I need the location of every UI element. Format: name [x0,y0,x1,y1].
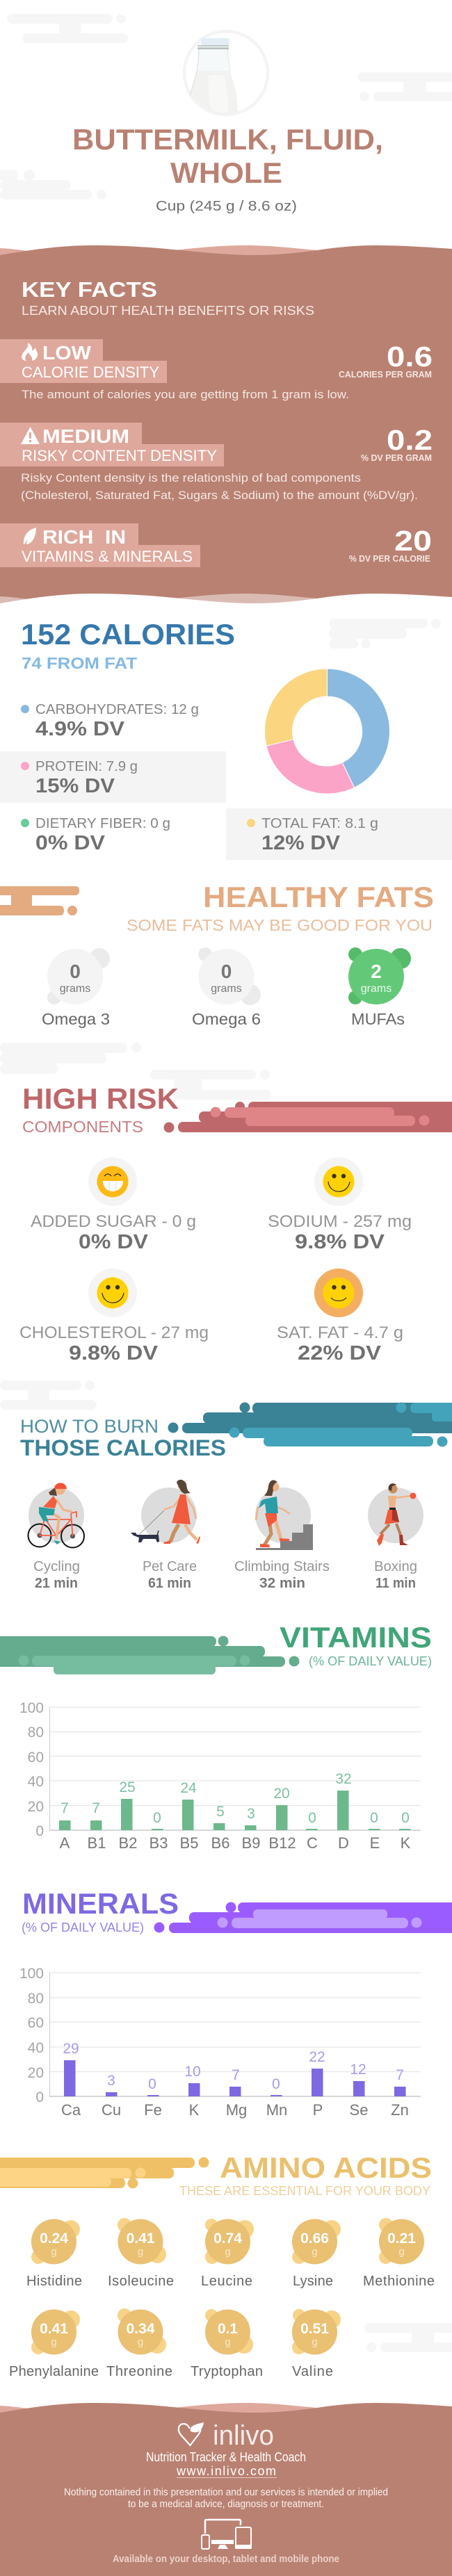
risk: saturated fat [277,1269,403,1364]
chart: minerals bar chart: Zn [391,2101,409,2119]
chart: minerals bar chart: 0 [148,2076,156,2092]
amino: lysine: 0.66 [300,2231,329,2247]
heading: healthy fats [127,881,434,934]
panel: key facts [0,245,452,613]
risk: saturated fat: SAT. FAT - 4.7 g [277,1323,403,1342]
panel: how to burn those calories [0,1380,452,1591]
amino: phenylalanine [9,2309,99,2379]
footer [0,2403,452,2576]
legend: carbohydrates: CARBOHYDRATES: 12 g [35,702,199,717]
header: product image and title [0,14,452,214]
fat: omega 3: grams [60,983,90,995]
fat: MUFAs: 2 [371,961,382,982]
chart: vitamins bar chart: 100 [19,1700,44,1716]
activity: pet care [131,1480,200,1591]
fact: risky content density: (Cholesterol, Saturated Fat, Sugars & Sodium) to the amount (%DV/gr). [21,489,418,502]
decoration: teal bars [168,1403,452,1447]
heading: minerals: (% OF DAILY VALUE) [22,1921,144,1934]
icon: inlivo heart logo [179,2422,204,2445]
fact: calorie density: The amount of calories you are getting from 1 gram is low. [22,389,349,401]
heading: key facts: LEARN ABOUT HEALTH BENEFITS OR RISKS [22,303,314,318]
chart: minerals bar chart: Mn [266,2101,287,2119]
heading: key facts [22,277,314,318]
activity: climbing stairs: Climbing Stairs [234,1559,330,1574]
decoration: orange bars [0,886,79,915]
risk: cholesterol: CHOLESTEROL - 27 mg [19,1323,209,1342]
chart: minerals bar chart: 3 [107,2073,115,2089]
fact: risky content density: RISKY CONTENT DENSITY [22,447,217,464]
chart: vitamins bar chart: 7 [60,1800,69,1816]
disclaimer: Nothing contained in this presentation and our services is intended or implied [64,2487,388,2498]
chart: vitamins bar chart: 24 [180,1780,197,1796]
tagline: Nutrition Tracker & Health Coach [146,2450,306,2464]
icon: milk bottle [184,31,268,115]
serving size: Cup (245 g / 8.6 oz) [156,199,297,214]
icon: leaf [24,528,36,544]
availability note: Available on your desktop, tablet and mobile phone [113,2554,339,2565]
amino: valine: 0.51 [300,2321,329,2337]
activity: pet care: Pet Care [143,1559,197,1574]
chart: vitamins bar chart: 0 [401,1810,410,1826]
amino: histidine: 0.24 [40,2231,68,2247]
amino: tryptophan: 0.1 [218,2321,238,2337]
legend: dietary fiber: 0% DV [35,832,106,854]
chart: vitamins bar chart: 25 [119,1779,136,1795]
heading: high risk: COMPONENTS [22,1118,143,1136]
heading: minerals [22,1887,179,1934]
panel: healthy fats [0,881,434,1028]
chart: vitamins bar chart: B2 [119,1834,137,1852]
chart: vitamins bar chart: K [401,1834,411,1852]
chart: minerals bar chart: 100 [19,1966,44,1982]
fact: risky content density: % DV PER GRAM [361,453,432,463]
fact: vitamins and minerals: RICH IN [42,526,126,548]
chart: vitamins bar chart: 0 [153,1810,161,1826]
decoration: green bars [0,1636,299,1674]
amino: threonine: Threonine [106,2364,172,2379]
chart: minerals bar chart: 0 [272,2076,280,2092]
amino: lysine: g [312,2246,318,2258]
activity: boxing: 11 min [376,1576,416,1591]
brand name: inlivo [213,2420,274,2451]
fact: calorie density [0,339,433,401]
legend: carbohydrates: 4.9% DV [35,718,125,740]
chart: minerals bar chart: 40 [28,2040,44,2056]
activity: boxing [368,1483,423,1591]
heading: minerals: MINERALS [22,1887,179,1920]
chart: minerals bar chart: Se [350,2101,368,2119]
amino: leucine [201,2219,254,2289]
heading: amino acids [179,2151,432,2198]
heading: vitamins: VITAMINS [280,1621,432,1654]
risk: sodium: 9.8% DV [295,1231,385,1253]
chart: vitamins bar chart: B12 [268,1834,296,1852]
risk: added sugar: 0% DV [79,1231,149,1253]
chart: minerals bar chart: Cu [102,2101,121,2119]
amino: threonine: 0.34 [127,2321,155,2337]
legend: total fat: 12% DV [261,832,341,854]
chart: minerals bar chart: K [189,2101,200,2119]
chart: vitamins bar chart: 20 [273,1786,290,1802]
chart: vitamins bar chart: 40 [28,1774,44,1790]
legend: dietary fiber: DIETARY FIBER: 0 g [35,816,170,831]
amino: phenylalanine: g [51,2336,57,2348]
heading: calories: 74 FROM FAT [22,654,137,672]
fat: omega 6 [192,947,261,1028]
activity: cycling: Cycling [33,1559,80,1574]
chart: vitamins bar chart: 60 [28,1750,44,1766]
heading: high risk: HIGH RISK [22,1082,179,1115]
decoration: purple bars [154,1902,452,1933]
chart: vitamins bar chart: 7 [92,1800,100,1816]
chart: minerals bar chart: 80 [28,1991,44,2007]
chart: vitamins bar chart: 80 [28,1725,44,1741]
chart: vitamins bar chart [19,1700,421,1852]
risk: sodium: SODIUM - 257 mg [268,1212,412,1231]
risk: added sugar: ADDED SUGAR - 0 g [31,1212,196,1231]
fat: omega 6: Omega 6 [192,1010,261,1028]
fact: vitamins and minerals: % DV PER CALORIE [349,554,430,564]
fat: MUFAs: MUFAs [351,1010,405,1028]
chart: minerals bar chart: Mg [226,2101,247,2119]
amino: methionine: g [398,2246,405,2258]
amino: histidine: Histidine [26,2274,82,2289]
fat: omega 3: Omega 3 [42,1010,110,1028]
activity: pet care: 61 min [148,1576,191,1591]
chart: vitamins bar chart: 32 [335,1771,352,1787]
amino: lysine: Lysine [293,2274,333,2289]
heading: high risk [22,1082,179,1136]
amino: isoleucine: Isoleucine [108,2274,174,2289]
fact: vitamins and minerals: 20 [394,525,432,557]
amino: leucine: Leucine [201,2274,252,2289]
chart: minerals bar chart: 7 [232,2067,240,2083]
fat: MUFAs [348,947,411,1028]
heading: healthy fats: SOME FATS MAY BE GOOD FOR YOU [127,916,433,934]
heading: amino acids: AMINO ACIDS [220,2151,432,2184]
legend: total fat: TOTAL FAT: 8.1 g [261,816,378,831]
risk: cholesterol [19,1269,209,1364]
legend: protein: 15% DV [35,775,115,797]
fact: risky content density: MEDIUM [42,425,129,447]
chart: minerals bar chart: 29 [63,2041,79,2057]
amino: histidine [26,2219,82,2289]
amino: tryptophan [191,2309,263,2379]
chart: vitamins bar chart: 3 [247,1806,255,1822]
fact: calorie density: CALORIES PER GRAM [339,370,432,380]
fact: calorie density: CALORIE DENSITY [22,364,159,381]
fact: risky content density: 0.2 [387,424,433,456]
amino: phenylalanine: Phenylalanine [9,2364,99,2379]
heading: burn calories [20,1416,226,1460]
heading: burn calories: HOW TO BURN [20,1416,159,1437]
activity: cycling [28,1483,84,1591]
disclaimer: to be a medical advice, diagnosis or treatment. [128,2499,324,2510]
chart: vitamins bar chart: A [60,1834,70,1852]
amino: threonine [106,2308,172,2379]
legend: protein: PROTEIN: 7.9 g [35,759,138,774]
heading: burn calories: THOSE CALORIES [20,1435,226,1460]
fat: MUFAs: grams [361,983,392,995]
chart: vitamins bar chart: 0 [308,1810,316,1826]
chart: vitamins bar chart: B6 [211,1834,229,1852]
chart: minerals bar chart: Ca [61,2101,81,2119]
legend: protein [0,751,226,803]
amino: valine: g [312,2336,318,2348]
chart: minerals bar chart: P [313,2101,323,2119]
chart: macronutrient donut [264,669,389,794]
chart: minerals bar chart: 7 [396,2067,404,2083]
chart: minerals bar chart: 20 [28,2065,44,2081]
chart: minerals bar chart: 0 [35,2089,44,2105]
heading: vitamins [280,1621,432,1668]
fact: risky content density [0,423,433,502]
icon: devices [202,2520,252,2549]
risk: cholesterol: 9.8% DV [69,1342,159,1364]
activity: climbing stairs: 32 min [259,1576,305,1591]
chart: vitamins bar chart: E [370,1834,380,1852]
heading: calories: 152 CALORIES [21,618,235,651]
title: BUTTERMILK, FLUID, [72,123,383,156]
amino: isoleucine: g [138,2246,143,2258]
title: WHOLE [170,156,282,189]
chart: minerals bar chart: Fe [144,2101,162,2119]
panel: vitamins [0,1621,432,1852]
heading: calories [21,618,235,672]
icon: warning triangle [21,427,40,444]
amino: methionine: 0.21 [387,2231,416,2247]
amino: tryptophan: g [225,2336,231,2348]
amino: methionine [363,2218,435,2289]
amino: isoleucine: 0.41 [127,2231,155,2247]
legend: carbohydrates [21,702,199,740]
heading: key facts: KEY FACTS [22,277,157,302]
disclaimer [64,2487,388,2510]
fact: calorie density: LOW [42,342,92,364]
chart: vitamins bar chart: D [338,1834,349,1852]
fact: calorie density: 0.6 [387,341,433,373]
chart: vitamins bar chart: 0 [370,1810,378,1826]
amino: valine: Valine [292,2364,333,2379]
heading: healthy fats: HEALTHY FATS [203,881,434,913]
fact: vitamins and minerals: VITAMINS & MINERALS [22,548,193,565]
activity: boxing: Boxing [374,1559,417,1574]
decoration: red bars [164,1102,452,1133]
amino: threonine: g [138,2336,143,2348]
amino: histidine: g [51,2246,57,2258]
chart: minerals bar chart [19,1966,421,2119]
chart: vitamins bar chart: B3 [150,1834,168,1852]
chart: vitamins bar chart: B5 [180,1834,198,1852]
legend: total fat [226,808,452,860]
title [72,123,383,189]
amino: valine [292,2309,341,2379]
fat: omega 6: 0 [221,961,232,982]
panel: amino acids [0,2151,452,2379]
activity: climbing stairs [234,1480,330,1591]
website link: www.inlivo.com [176,2464,276,2478]
risk: added sugar [31,1157,196,1253]
chart: vitamins bar chart: C [307,1834,318,1852]
heading: vitamins: (% OF DAILY VALUE) [309,1654,432,1668]
chart: minerals bar chart: 60 [28,2015,44,2031]
chart: minerals bar chart: 10 [184,2064,201,2080]
heading: amino acids: THESE ARE ESSENTIAL FOR YOUR BODY [179,2183,430,2198]
amino: leucine: 0.74 [213,2231,242,2247]
panel: minerals [19,1887,452,2119]
fat: omega 3: 0 [70,961,81,982]
icon: flame [22,343,38,361]
amino: phenylalanine: 0.41 [40,2321,68,2337]
chart: vitamins bar chart: B1 [88,1834,106,1852]
fact: vitamins and minerals [0,523,432,567]
amino: isoleucine [108,2218,174,2289]
fat: omega 3 [42,948,110,1028]
chart: vitamins bar chart: 5 [216,1804,225,1820]
panel: calories [0,618,452,860]
chart: minerals bar chart: 12 [350,2062,366,2078]
risk: sodium [268,1157,412,1253]
amino: tryptophan: Tryptophan [191,2364,263,2379]
risk: saturated fat: 22% DV [298,1342,382,1364]
decoration: amber bars [0,2158,209,2188]
amino: methionine: Methionine [363,2274,435,2289]
chart: vitamins bar chart: B9 [242,1834,260,1852]
chart: minerals bar chart: 22 [309,2049,325,2065]
chart: vitamins bar chart: 20 [28,1799,44,1815]
legend: dietary fiber [21,816,170,854]
panel: high risk components [0,1043,452,1364]
fact: risky content density: Risky Content density is the relationship of bad components [21,472,361,484]
amino: lysine [292,2219,341,2289]
amino: leucine: g [225,2246,231,2258]
activity: cycling: 21 min [35,1576,78,1591]
chart: vitamins bar chart: 0 [35,1823,44,1839]
fat: omega 6: grams [211,983,242,995]
